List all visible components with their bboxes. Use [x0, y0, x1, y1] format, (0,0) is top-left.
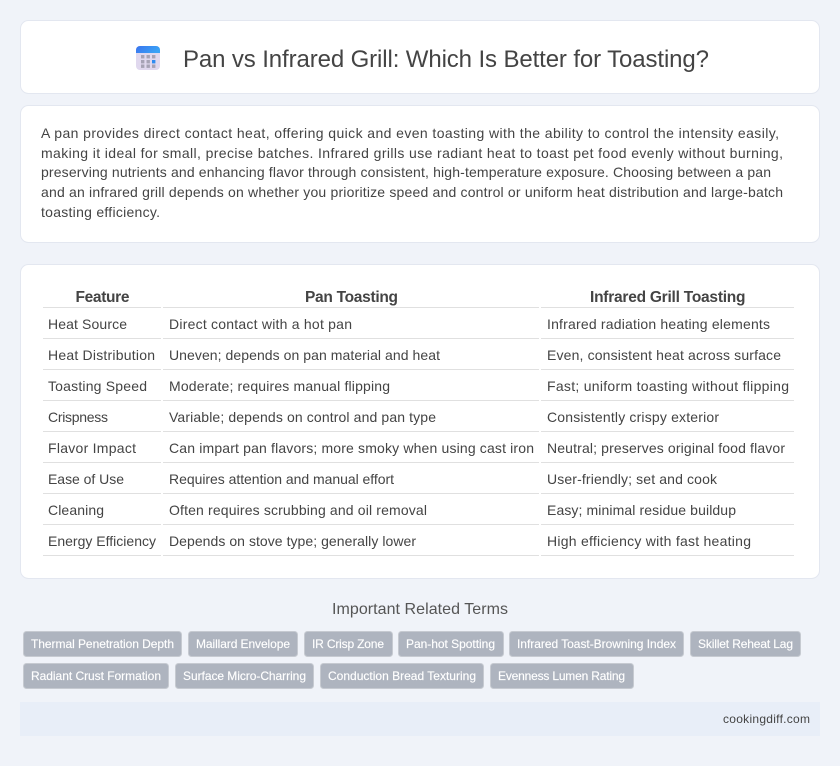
row: toasting speed — [48, 378, 789, 394]
row: flavor impact — [48, 440, 785, 456]
row: flavor impact: Can impart pan flavors; more smoky when using cast iron — [169, 440, 534, 456]
row: energy efficiency: Depends on stove type; generally lower — [169, 533, 416, 549]
row: cleaning: Often requires scrubbing and oil removal — [169, 502, 427, 518]
row: heat distribution: Even, consistent heat across surface — [547, 347, 781, 363]
intro paragraph: and an infrared grill depends on whether you prioritize speed and control or uniform heat distribution and large-batch — [41, 184, 783, 200]
tag list: Maillard Envelope — [196, 637, 290, 651]
tag list: Infrared Toast-Browning Index — [517, 637, 676, 651]
panel: introduction — [20, 106, 820, 242]
row: energy efficiency: High efficiency with fast heating — [547, 533, 751, 549]
row: crispness — [48, 409, 719, 425]
table header: Pan Toasting — [305, 289, 398, 306]
tag list: Surface Micro-Charring — [183, 669, 306, 683]
table header: Feature — [76, 289, 130, 306]
row: cleaning: Easy; minimal residue buildup — [547, 502, 736, 518]
tag list: IR Crisp Zone — [312, 637, 384, 651]
row: cleaning — [48, 502, 736, 518]
row: heat source: Heat Source — [48, 316, 127, 332]
row: flavor impact: Flavor Impact — [48, 440, 136, 456]
row: cleaning: Cleaning — [48, 502, 104, 518]
intro paragraph: A pan provides direct contact heat, offering quick and even toasting with the ability to control the intensity easily, — [41, 125, 779, 141]
heading: related terms: Important Related Terms — [332, 601, 508, 618]
footer — [20, 702, 820, 736]
row: heat source: Direct contact with a hot pan — [169, 316, 352, 332]
intro paragraph — [41, 125, 783, 220]
row: ease of use: Requires attention and manual effort — [169, 471, 394, 487]
intro paragraph: preserving nutrients and enhancing flavor through consistent, high-temperature exposure. Choosing between a pan — [41, 164, 771, 180]
row: crispness: Variable; depends on control and pan type — [169, 409, 436, 425]
tag list: Skillet Reheat Lag — [698, 637, 793, 651]
row: energy efficiency — [48, 533, 751, 549]
row: heat source — [48, 316, 770, 332]
tag list: Conduction Bread Texturing — [328, 669, 476, 683]
tag list: Radiant Crust Formation — [31, 669, 161, 683]
row: heat source: Infrared radiation heating elements — [547, 316, 770, 332]
row: toasting speed: Toasting Speed — [48, 378, 147, 394]
title: Pan vs Infrared Grill: Which Is Better for Toasting? — [183, 46, 709, 73]
intro paragraph: making it ideal for small, precise batches. Infrared grills use radiant heat to toast pet food evenly without burning, — [41, 145, 783, 161]
tag list: Thermal Penetration Depth — [31, 637, 174, 651]
row: flavor impact: Neutral; preserves original food flavor — [547, 440, 785, 456]
row: toasting speed: Moderate; requires manual flipping — [169, 378, 390, 394]
intro paragraph: toasting efficiency. — [41, 204, 160, 220]
row: ease of use — [48, 471, 718, 487]
table header: Infrared Grill Toasting — [590, 289, 746, 306]
table header — [76, 289, 746, 306]
row: toasting speed: Fast; uniform toasting without flipping — [547, 378, 789, 394]
row: heat distribution: Heat Distribution — [48, 347, 155, 363]
panel: comparison table — [20, 264, 820, 578]
row: heat distribution — [48, 347, 781, 363]
row: energy efficiency: Energy Efficiency — [48, 533, 156, 549]
row: heat distribution: Uneven; depends on pan material and heat — [169, 347, 440, 363]
footer: cookingdiff.com — [723, 712, 810, 726]
tag list: Evenness Lumen Rating — [498, 669, 625, 683]
tag list — [24, 632, 800, 688]
panel: title card — [20, 20, 820, 94]
row: crispness: Crispness — [48, 409, 108, 425]
row: ease of use: User-friendly; set and cook — [547, 471, 718, 487]
row: crispness: Consistently crispy exterior — [547, 409, 719, 425]
row: ease of use: Ease of Use — [48, 471, 124, 487]
icon: calendar grid — [136, 46, 160, 70]
tag list: Pan-hot Spotting — [406, 637, 495, 651]
